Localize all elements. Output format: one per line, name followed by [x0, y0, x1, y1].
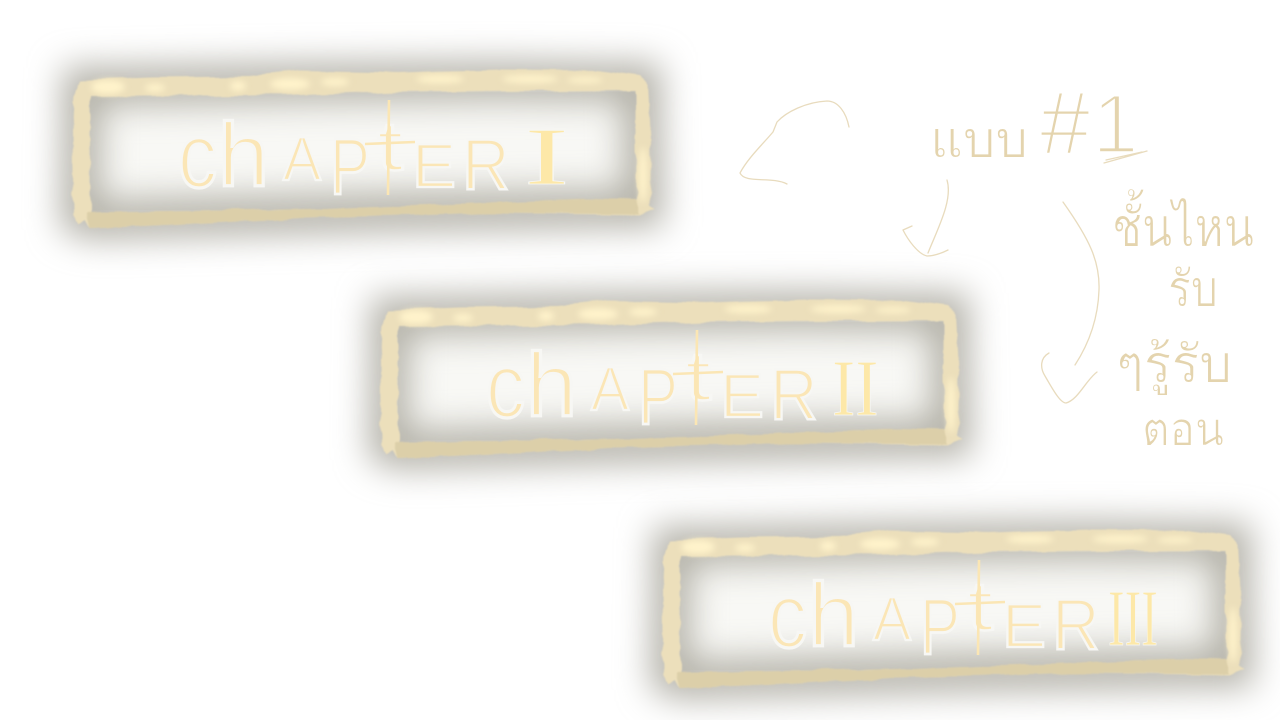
heading: chapter II: II — [832, 345, 879, 433]
note: handwritten Thai lines: รับ — [1168, 261, 1218, 317]
note: design number one — [930, 74, 1147, 174]
panel: chapter II — [380, 300, 963, 458]
note: handwritten Thai lines: ๆรู้รับ — [1116, 336, 1232, 396]
heading: chapter I: I — [524, 112, 569, 202]
panel: chapter I — [72, 70, 655, 228]
note: design number one: # — [1040, 74, 1090, 174]
heading: chapter III — [768, 560, 1158, 671]
heading: chapter II — [486, 330, 879, 441]
frame: chapter III border — [662, 530, 1245, 688]
arrow: long curved down — [1042, 202, 1099, 403]
note: handwritten Thai lines — [1112, 189, 1254, 455]
frame: chapter I border — [72, 70, 655, 228]
arrow: down to option one — [903, 180, 948, 256]
note: design number one: แบบ — [930, 112, 1028, 168]
note: design number one: 1 — [1092, 77, 1139, 171]
heading: chapter I — [178, 100, 569, 211]
panel: chapter III — [662, 530, 1245, 688]
arrow: curved sketch line — [740, 101, 849, 184]
heading: chapter III: III — [1108, 575, 1158, 663]
note: handwritten Thai lines: ตอน — [1142, 403, 1224, 455]
frame: chapter II border — [380, 300, 963, 458]
